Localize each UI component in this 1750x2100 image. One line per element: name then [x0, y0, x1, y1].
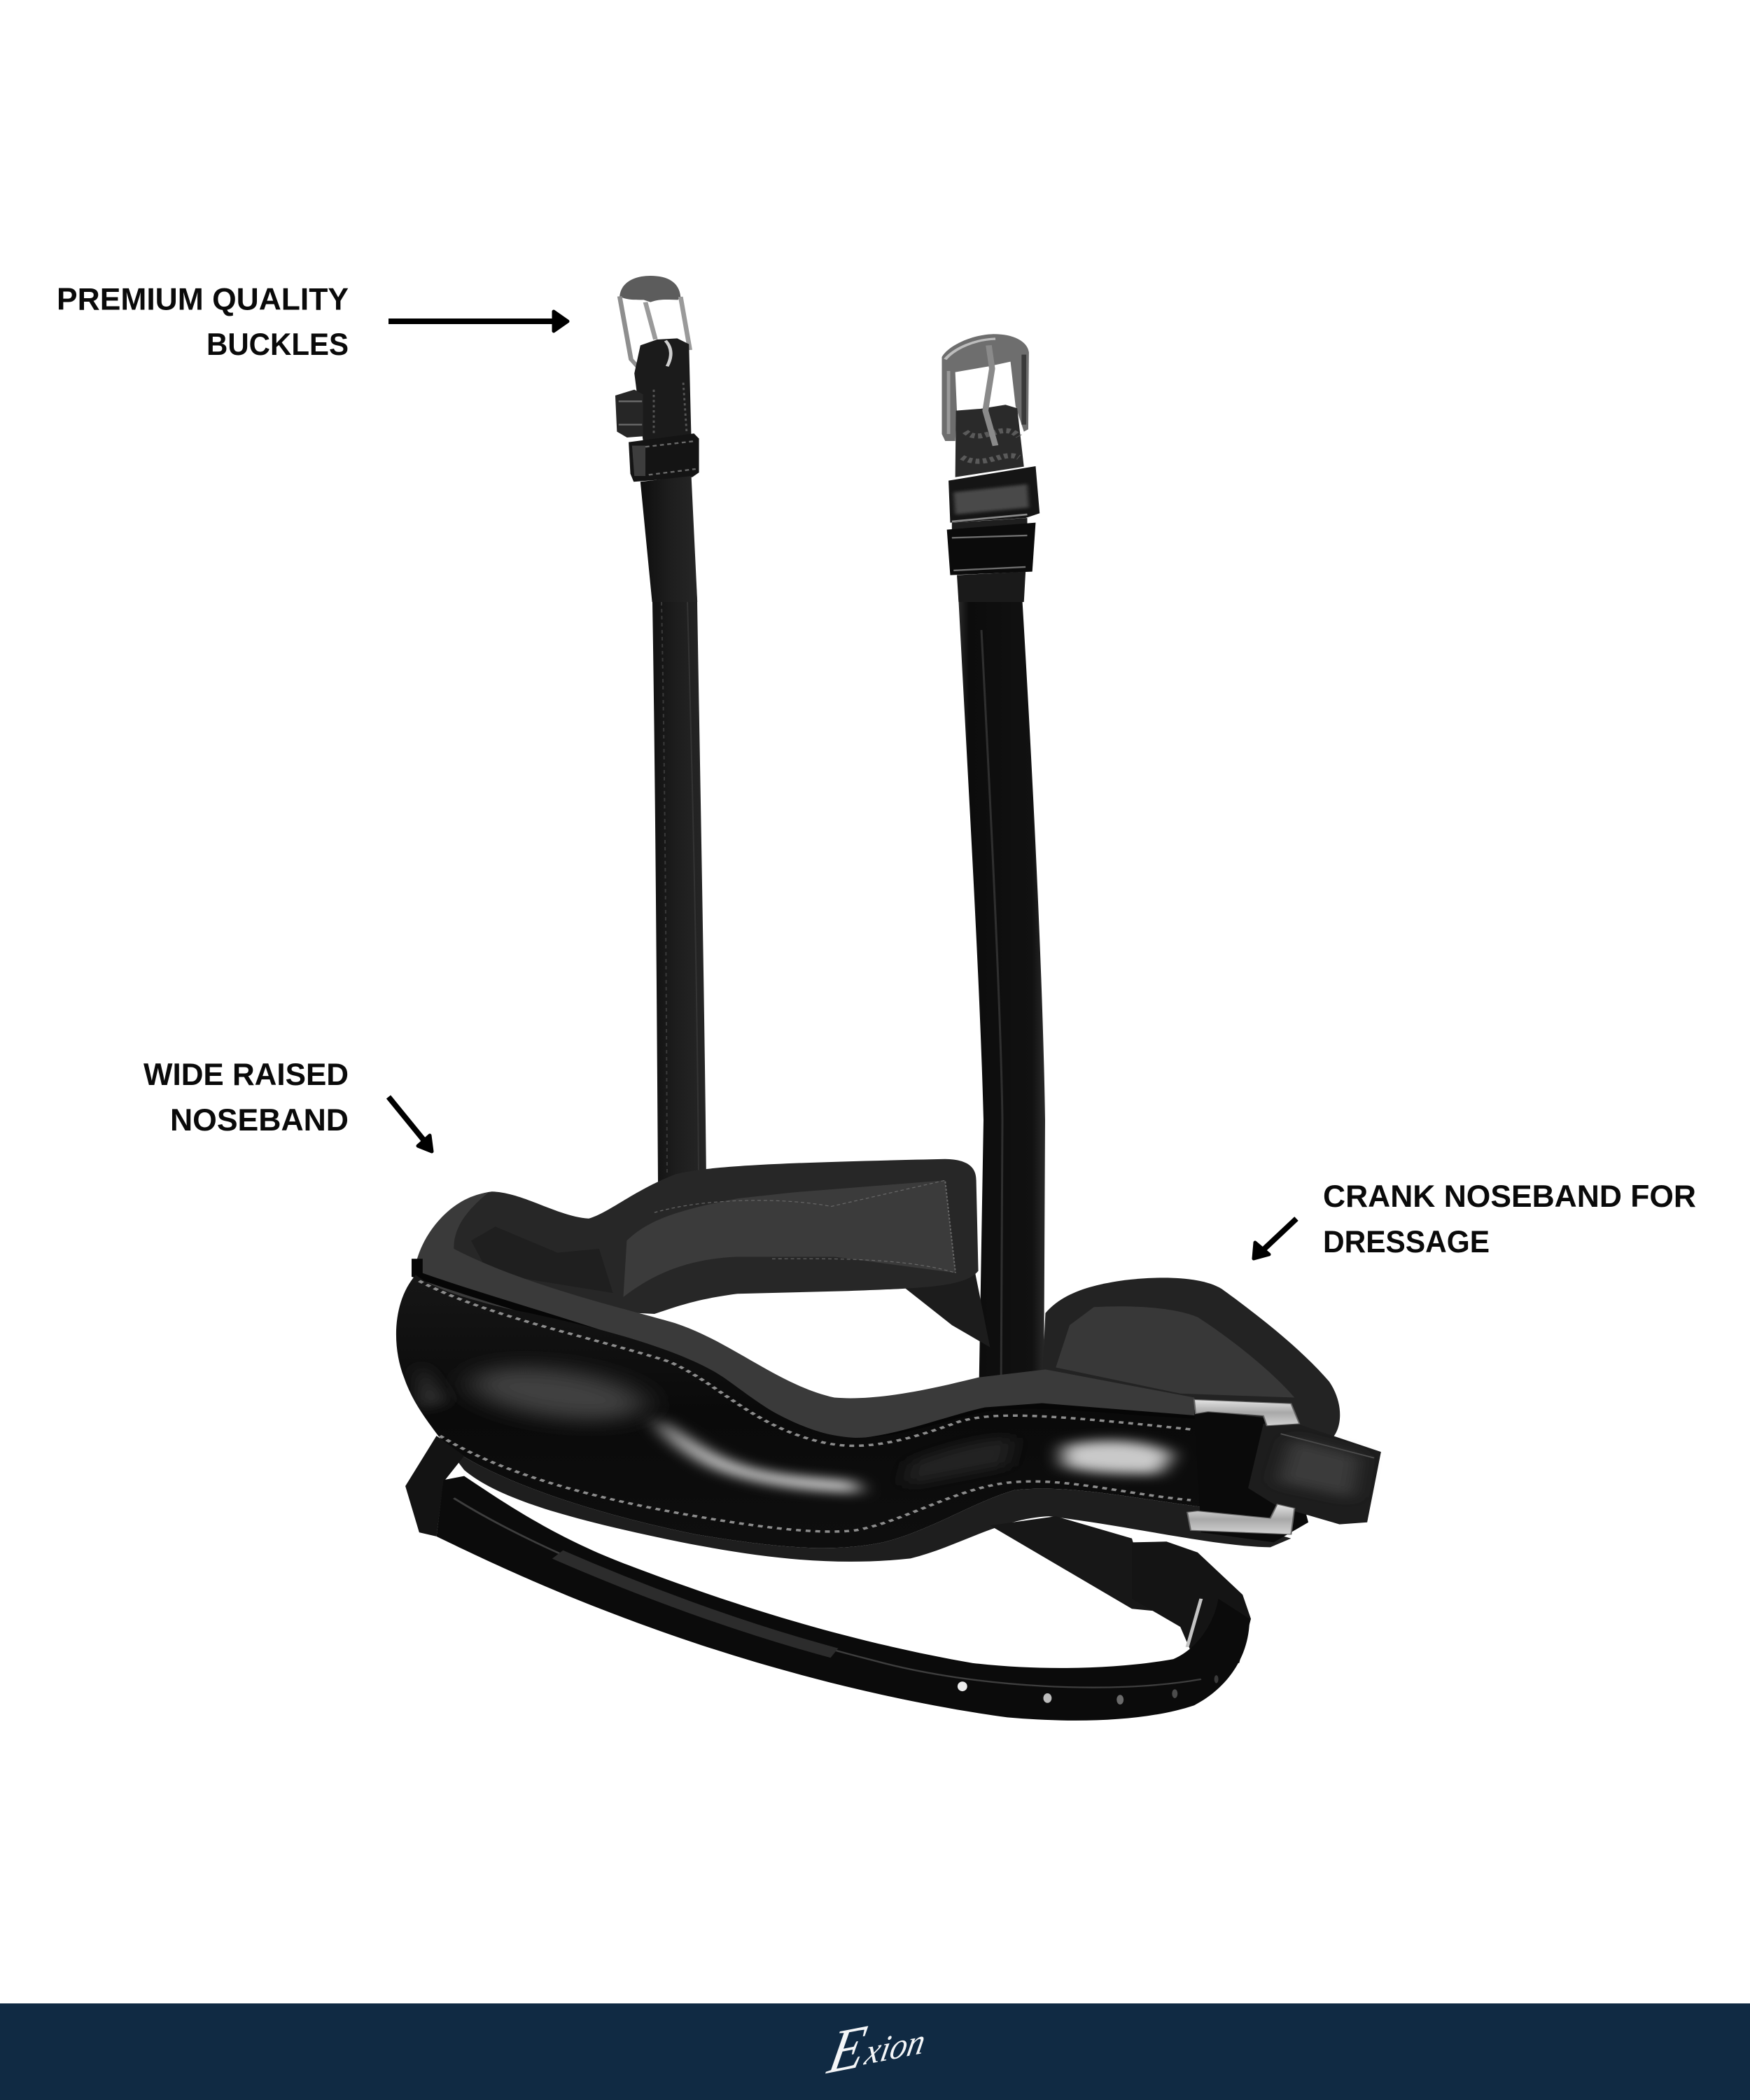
logo: Exion: xion: [861, 2021, 929, 2073]
noseband assembly: [396, 1159, 1381, 1721]
arrow: to noseband: [388, 1097, 432, 1152]
label: wide raised noseband: NOSEBAND: [170, 1103, 349, 1138]
lower stitching: [440, 1436, 1191, 1532]
upper roller buckle: [1194, 1399, 1299, 1426]
label: wide raised noseband: [144, 1058, 349, 1138]
left buckle and keepers: [615, 275, 699, 602]
label: premium quality buckles: BUCKLES: [206, 328, 349, 362]
right cheek strap: [958, 595, 1045, 1408]
glossy front band: [396, 1275, 1215, 1548]
lower roller buckle: [1187, 1504, 1294, 1534]
lower leather rim: [441, 1440, 1291, 1562]
product: noseband photo illustration: [396, 275, 1381, 1721]
bottom strap rear piece: [990, 1516, 1251, 1663]
arrow: to buckle: [388, 312, 568, 331]
end loop: [1194, 1410, 1381, 1542]
rim dark edge: [417, 1259, 1208, 1442]
label: crank noseband for dressage: CRANK NOSEBAND FOR: [1323, 1180, 1696, 1214]
label: premium quality buckles: [57, 283, 349, 362]
logo: Exion: [822, 1999, 933, 2087]
left cheek strap: [645, 483, 706, 1183]
upper stitching: [419, 1281, 1194, 1446]
arrow: to crank noseband: [1254, 1219, 1296, 1259]
back inner pad: [419, 1159, 979, 1314]
left strap loop: [405, 1436, 464, 1536]
top rim: [412, 1192, 1208, 1458]
connecting strap behind: [904, 1261, 990, 1348]
right inner pad: [1042, 1278, 1340, 1438]
right buckle and keepers: [941, 334, 1040, 602]
bottom strap: [437, 1476, 1250, 1721]
label: premium quality buckles: PREMIUM QUALITY: [57, 283, 349, 316]
label: crank noseband for dressage: DRESSAGE: [1323, 1225, 1490, 1259]
logo: Exion: E: [822, 2011, 872, 2087]
label: wide raised noseband: WIDE RAISED: [144, 1058, 349, 1092]
label: crank noseband for dressage: [1323, 1180, 1696, 1259]
footer bar: [0, 1999, 1750, 2100]
